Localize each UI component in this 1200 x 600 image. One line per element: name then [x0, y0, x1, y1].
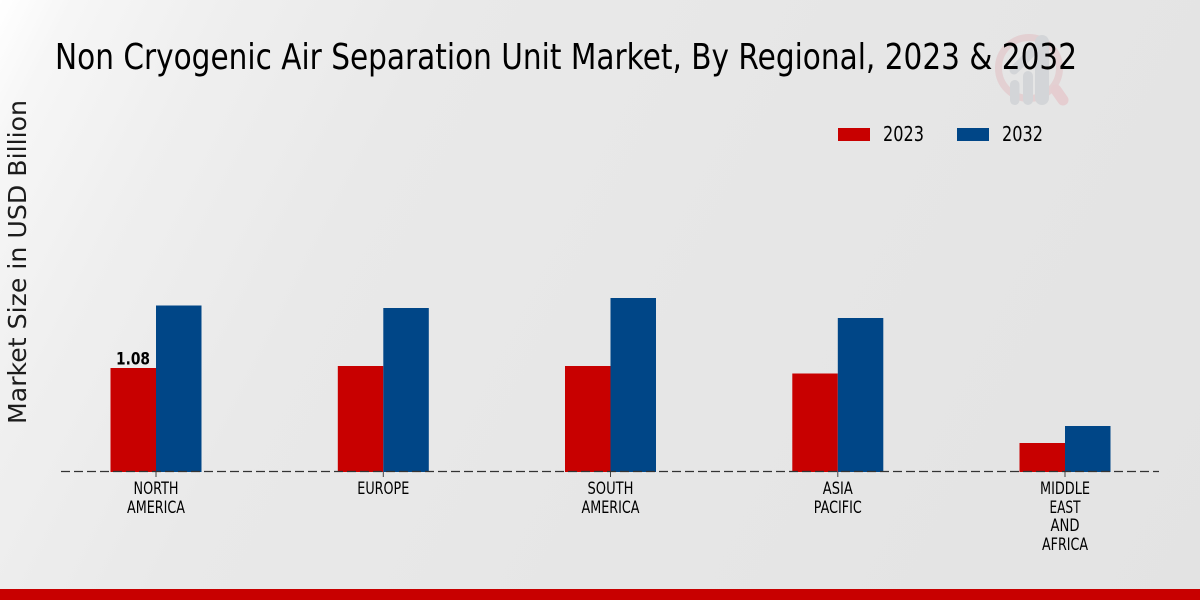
- y axis label: Market Size in USD Billion: [3, 100, 32, 424]
- category label: Middle East and Africa: AND: [1050, 516, 1080, 536]
- Middle East and Africa bars: [1020, 426, 1110, 472]
- bar chart: [61, 298, 1159, 477]
- category label: South America: AMERICA: [582, 498, 640, 518]
- legend item: 2023: [838, 122, 924, 146]
- Europe bars: [338, 308, 429, 472]
- category label: Asia Pacific: [814, 479, 862, 518]
- watermark logo: [998, 35, 1063, 105]
- category label: North America: NORTH: [134, 479, 178, 499]
- North America bars: [110, 306, 202, 472]
- South America bars: [565, 298, 656, 472]
- legend item: 2032: 2032: [1002, 122, 1043, 146]
- category label: North America: [127, 479, 185, 518]
- footer bar: [0, 589, 1200, 600]
- legend item: 2032: [957, 122, 1043, 146]
- category label: Middle East and Africa: MIDDLE: [1040, 479, 1090, 499]
- category label: Asia Pacific: PACIFIC: [814, 498, 862, 518]
- category label: Middle East and Africa: [1040, 479, 1090, 555]
- legend: [838, 122, 1043, 146]
- category label: Europe: EUROPE: [357, 479, 409, 499]
- category label: Middle East and Africa: AFRICA: [1042, 535, 1088, 555]
- category label: South America: [582, 479, 640, 518]
- category label: Asia Pacific: ASIA: [823, 479, 853, 499]
- category label: North America: AMERICA: [127, 498, 185, 518]
- Asia Pacific bars: [792, 318, 883, 472]
- category label: Middle East and Africa: EAST: [1050, 498, 1081, 518]
- category label: South America: SOUTH: [588, 479, 634, 499]
- legend item: 2023: 2023: [883, 122, 924, 146]
- data label: 1.08: 1.08: [116, 350, 150, 368]
- baseline: [61, 470, 1159, 472]
